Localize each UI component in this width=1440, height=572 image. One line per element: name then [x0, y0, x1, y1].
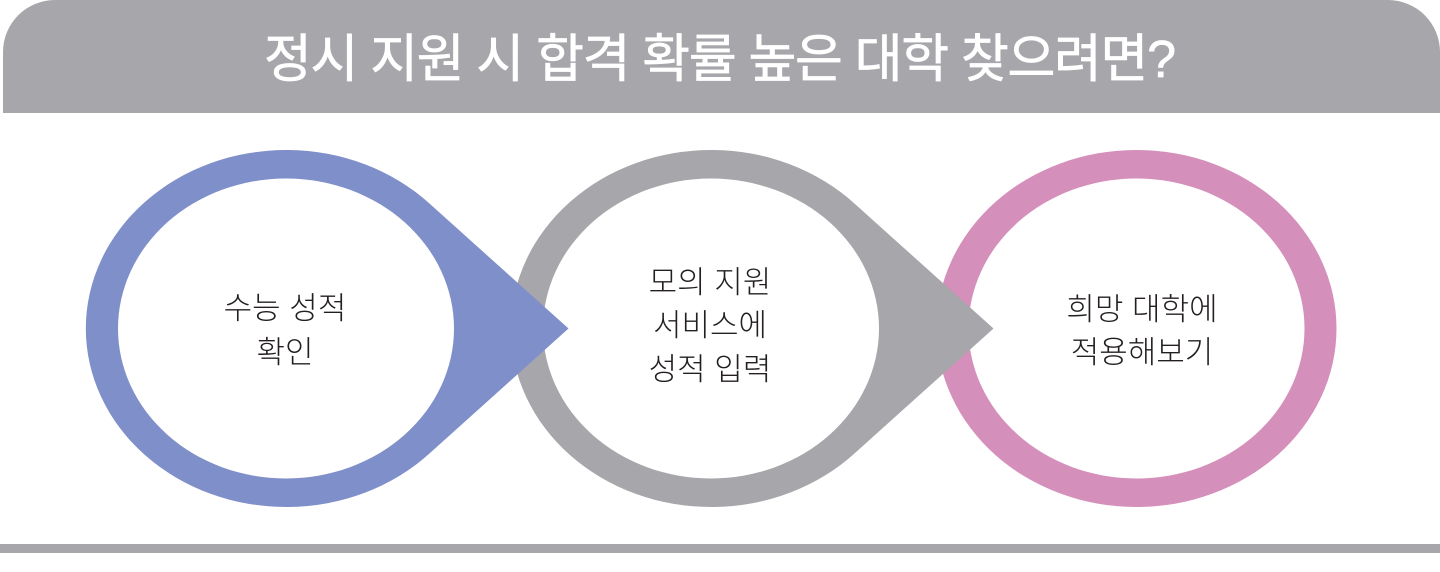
step 1 label: 확인 [256, 335, 314, 370]
step 3: pink ring [936, 150, 1336, 507]
step 2 label: 성적 입력 [649, 352, 771, 387]
step 3 label: 희망 대학에 [1066, 292, 1218, 327]
step 3 label: 적용해보기 [1071, 335, 1213, 370]
header banner [3, 0, 1440, 113]
step 1: blue arrow ring [86, 150, 569, 507]
step 1 label: 수능 성적 [224, 291, 346, 326]
step 2: gray arrow ring [511, 150, 994, 507]
step 2 label: 서비스에 [653, 308, 767, 343]
bottom rule [0, 544, 1440, 553]
title: 정시 지원 시 합격 확률 높은 대학 찾으려면? [264, 31, 1176, 89]
step 2 label: 모의 지원 [649, 265, 771, 300]
